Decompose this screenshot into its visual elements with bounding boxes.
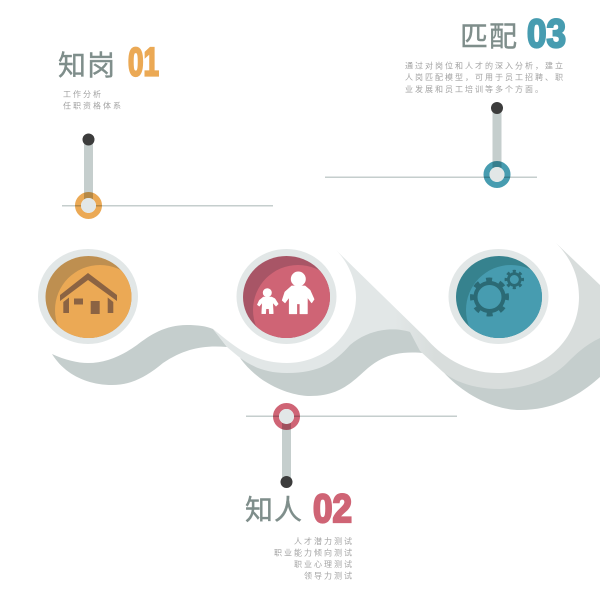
- text block 03: [405, 60, 565, 94]
- icon: gears: [448, 249, 548, 344]
- text block 02: [274, 536, 354, 580]
- text block 03: 人岗匹配模型，可用于员工招聘、职: [405, 72, 565, 82]
- text block 02: 人才潜力测试: [294, 536, 354, 546]
- heading 03: 03: [527, 12, 566, 56]
- heading 03: [460, 12, 566, 56]
- heading 01: 01: [128, 40, 159, 84]
- text block 01: 任职资格体系: [63, 100, 123, 110]
- text block 02: 职业能力倾向测试: [274, 548, 354, 558]
- text block 02: 职业心理测试: [294, 559, 354, 569]
- pin 01: [62, 134, 273, 216]
- heading 01: 知岗: [58, 50, 115, 81]
- pin 03: [325, 102, 537, 185]
- pin 02: [246, 406, 457, 488]
- icon: people: [236, 249, 336, 344]
- heading 02: [245, 487, 352, 531]
- heading 02: 知人: [245, 494, 302, 526]
- heading 03: 匹配: [460, 21, 517, 52]
- text block 03: 业发展和员工培训等多个方面。: [405, 84, 545, 94]
- heading 01: [58, 40, 159, 84]
- icon: house: [38, 249, 138, 344]
- text block 01: 工作分析: [63, 89, 103, 99]
- wave ribbon: [52, 243, 600, 410]
- heading 02: 02: [313, 487, 352, 531]
- text block 03: 通过对岗位和人才的深入分析，建立: [405, 60, 565, 70]
- text block 01: [63, 89, 123, 110]
- text block 02: 领导力测试: [304, 570, 354, 580]
